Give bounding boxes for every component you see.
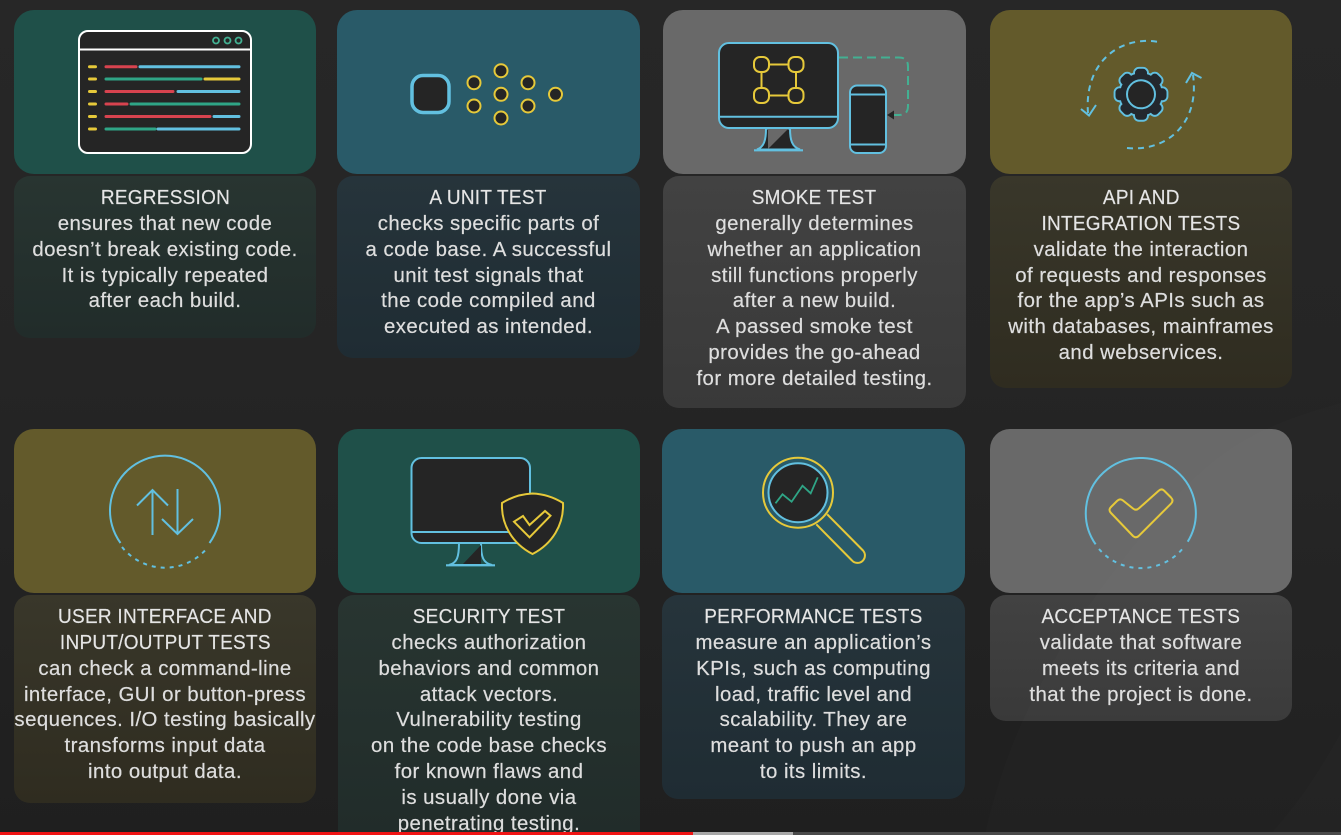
- icon: monitor with shield: [410, 457, 564, 566]
- description: API and integration: with databases, mainframes: [1008, 316, 1274, 338]
- icon: monitor and phone: [718, 42, 909, 154]
- description: unit test: a code base. A successful: [366, 239, 611, 261]
- card: performance tests: [662, 429, 965, 799]
- card: regression: [14, 10, 316, 314]
- progress: played: [0, 832, 693, 835]
- description: API and integration: validate the interaction: [1034, 239, 1248, 261]
- description: API and integration: [1008, 187, 1274, 364]
- card: smoke test: [663, 10, 966, 408]
- icon: gear with circular arrows: [1080, 40, 1202, 150]
- description: regression: [32, 187, 298, 312]
- text panel: regression: [14, 176, 316, 338]
- description: user interface: USER INTERFACE AND: [58, 606, 272, 628]
- icon: block and dots: [410, 63, 563, 126]
- description: regression: doesn’t break existing code.: [32, 239, 298, 261]
- description: security: Vulnerability testing: [396, 709, 582, 731]
- text panel: security: [338, 595, 640, 835]
- description: security: for known flaws and: [395, 761, 583, 783]
- description: user interface: can check a command-line: [38, 658, 292, 680]
- description: acceptance: [1029, 606, 1253, 706]
- description: unit test: unit test signals that: [393, 265, 584, 287]
- card: acceptance tests: [990, 429, 1292, 721]
- description: acceptance: that the project is done.: [1029, 684, 1253, 706]
- text panel: performance: [662, 595, 965, 799]
- description: API and integration: INTEGRATION TESTS: [1042, 213, 1240, 235]
- video progress bar: [0, 832, 1341, 835]
- description: unit test: A UNIT TEST: [430, 187, 547, 209]
- description: acceptance: validate that software: [1040, 632, 1242, 654]
- description: smoke test: whether an application: [708, 239, 921, 261]
- description: unit test: checks specific parts of: [378, 213, 599, 235]
- description: performance: load, traffic level and: [715, 684, 912, 706]
- icon panel: smoke test: [663, 10, 966, 174]
- description: smoke test: still functions properly: [711, 265, 918, 287]
- icon panel: unit test: [337, 10, 640, 174]
- description: regression: after each build.: [89, 290, 241, 312]
- icon: up and down arrows in circle: [109, 454, 221, 569]
- description: security: [371, 606, 607, 835]
- icon panel: code window: [14, 10, 316, 174]
- description: performance: scalability. They are: [720, 709, 907, 731]
- description: regression: ensures that new code: [58, 213, 272, 235]
- card: security test: [338, 429, 640, 835]
- description: user interface: [14, 606, 316, 783]
- description: performance: [696, 606, 932, 783]
- description: user interface: interface, GUI or button-press: [24, 684, 306, 706]
- description: API and integration: of requests and responses: [1015, 265, 1267, 287]
- description: unit test: executed as intended.: [384, 316, 593, 338]
- description: smoke test: A passed smoke test: [716, 316, 913, 338]
- description: security: penetrating testing.: [398, 813, 580, 835]
- description: unit test: [366, 187, 611, 338]
- card: unit test: [337, 10, 640, 358]
- icon panel: user interface: [14, 429, 316, 593]
- description: performance: KPIs, such as computing: [696, 658, 931, 680]
- text panel: API and integration: [990, 176, 1292, 388]
- description: smoke test: for more detailed testing.: [696, 368, 933, 390]
- description: smoke test: after a new build.: [733, 290, 896, 312]
- description: user interface: into output data.: [88, 761, 242, 783]
- description: performance: measure an application’s: [696, 632, 932, 654]
- description: smoke test: [696, 187, 933, 390]
- text panel: smoke test: [663, 176, 966, 408]
- description: smoke test: provides the go-ahead: [708, 342, 921, 364]
- description: security: on the code base checks: [371, 735, 607, 757]
- card: API and integration tests: [990, 10, 1292, 388]
- description: user interface: transforms input data: [64, 735, 266, 757]
- description: performance: to its limits.: [760, 761, 867, 783]
- description: acceptance: ACCEPTANCE TESTS: [1042, 606, 1240, 628]
- description: security: SECURITY TEST: [413, 606, 565, 628]
- description: API and integration: for the app’s APIs such as: [1017, 290, 1265, 312]
- description: security: checks authorization: [392, 632, 586, 654]
- description: unit test: the code compiled and: [381, 290, 596, 312]
- text panel: acceptance: [990, 595, 1292, 721]
- text panel: unit test: [337, 176, 640, 358]
- icon panel: acceptance: [990, 429, 1292, 593]
- icon panel: security: [338, 429, 640, 593]
- progress: buffered: [693, 832, 793, 835]
- icon: magnifier with trend line: [762, 456, 866, 564]
- description: user interface: INPUT/OUTPUT TESTS: [60, 632, 270, 654]
- description: regression: It is typically repeated: [62, 265, 268, 287]
- icon panel: performance: [662, 429, 965, 593]
- description: regression: REGRESSION: [100, 187, 230, 209]
- description: security: behaviors and common: [379, 658, 599, 680]
- icon panel: API and integration: [990, 10, 1292, 174]
- text panel: user interface: [14, 595, 316, 803]
- description: security: attack vectors.: [420, 684, 558, 706]
- icon: check mark in circle: [1084, 457, 1197, 570]
- description: performance: meant to push an app: [710, 735, 917, 757]
- icon: code window: [78, 30, 252, 154]
- description: acceptance: meets its criteria and: [1042, 658, 1240, 680]
- card: user interface and I/O tests: [14, 429, 316, 803]
- description: security: is usually done via: [401, 787, 577, 809]
- description: API and integration: and webservices.: [1059, 342, 1223, 364]
- description: smoke test: generally determines: [715, 213, 914, 235]
- description: user interface: sequences. I/O testing basically: [14, 709, 316, 731]
- description: performance: PERFORMANCE TESTS: [704, 606, 923, 628]
- description: API and integration: API AND: [1103, 187, 1179, 209]
- description: smoke test: SMOKE TEST: [752, 187, 877, 209]
